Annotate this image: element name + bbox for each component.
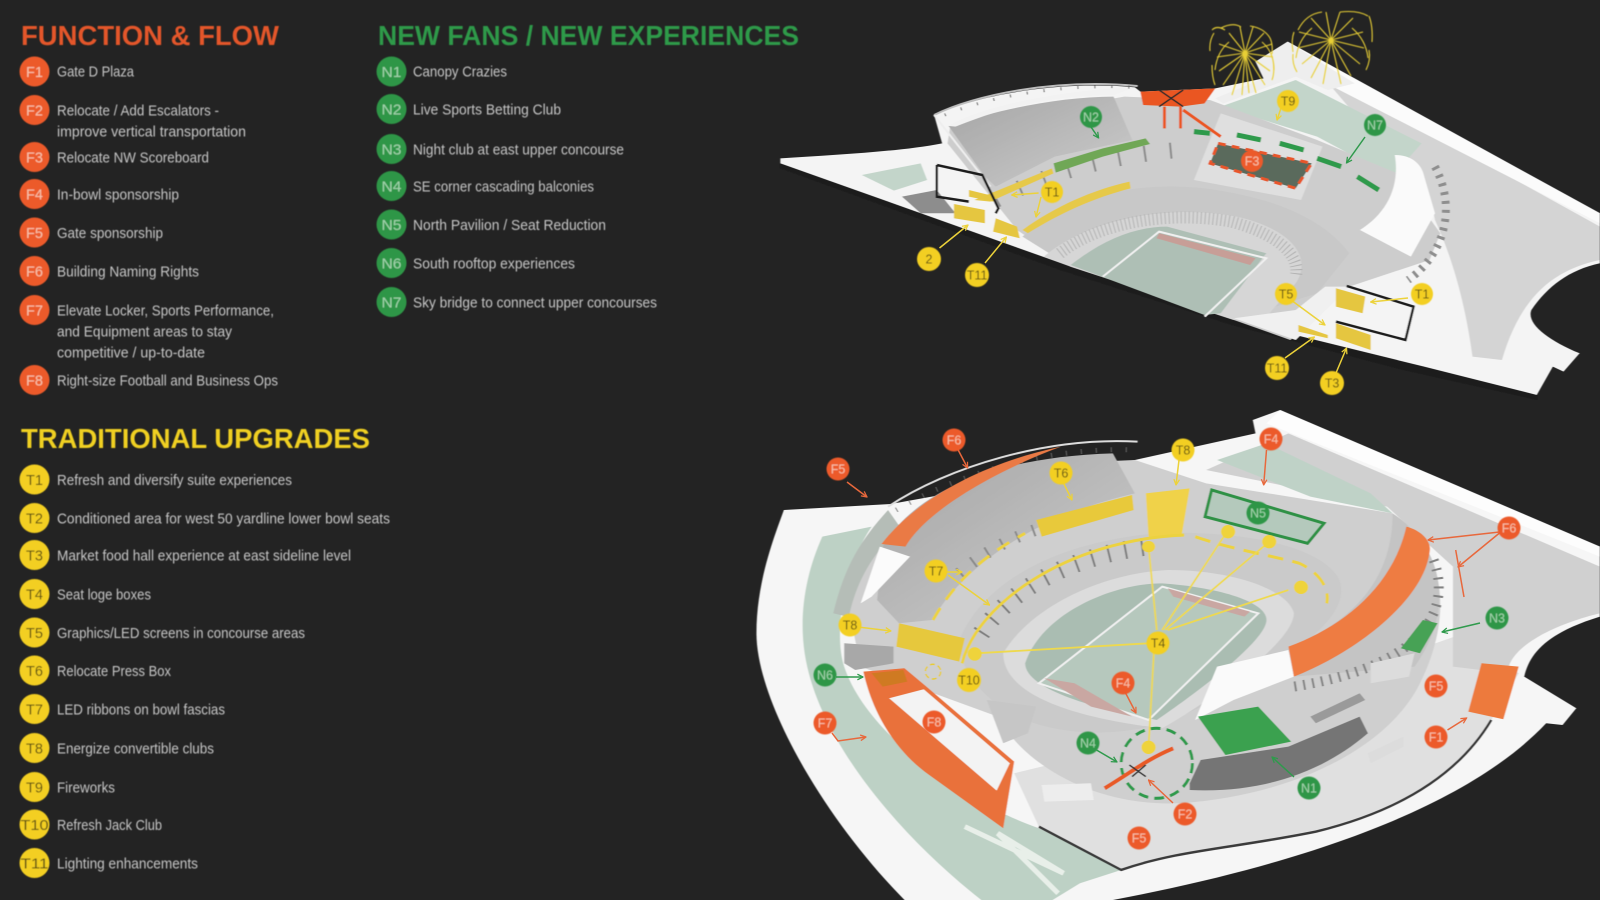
badge N2: N2 (1083, 110, 1099, 124)
field (1071, 227, 1266, 317)
item F3: F3 (26, 150, 43, 166)
item F2 (20, 95, 246, 140)
item F5 (20, 218, 163, 248)
item F8: F8 (26, 372, 43, 390)
item T8: T8 (26, 740, 43, 758)
badge T11 east: T11 (1267, 362, 1287, 376)
badge T6 (1050, 462, 1072, 484)
stadium: lower overall view (756, 410, 1600, 900)
east stand ribs (1408, 167, 1446, 280)
badge N6: N6 (817, 668, 833, 682)
betting club green strip (1054, 138, 1150, 173)
seating bowl rows (1060, 217, 1296, 277)
item N5: North Pavilion / Seat Reduction (413, 218, 606, 234)
item N5 (376, 210, 606, 240)
badge F7: F7 (818, 716, 832, 730)
item T5: Graphics/LED screens in concourse areas (57, 626, 305, 642)
badge T8 north (1172, 438, 1194, 462)
item T5 (20, 618, 305, 648)
badge T4: T4 (1151, 636, 1165, 650)
thin F6 sign line (1456, 550, 1464, 597)
roof band edge (1274, 42, 1600, 223)
arrow T3 (1336, 348, 1346, 373)
item N2 (376, 94, 561, 124)
relocated scoreboard marker (1140, 88, 1221, 137)
T4 loge lines (976, 530, 1288, 747)
arrow T1 east (1371, 298, 1408, 302)
item N4 (376, 171, 594, 201)
item N7 (376, 287, 657, 317)
badge F4 north: F4 (1264, 432, 1278, 446)
item T7: LED ribbons on bowl fascias (57, 702, 225, 718)
item F1: Gate D Plaza (57, 64, 135, 80)
item F1: F1 (26, 64, 43, 81)
item F7: competitive / up-to-date (57, 346, 205, 362)
item N7: Sky bridge to connect upper concourses (413, 296, 657, 312)
arrow T7 b (946, 571, 962, 573)
item T4: T4 (26, 586, 43, 604)
item N7: N7 (382, 294, 402, 312)
item F4 (20, 179, 179, 209)
east scoreboard pavilion (1194, 113, 1322, 200)
badge F6 west (942, 428, 966, 452)
fireworks (1210, 12, 1372, 95)
item T4: Seat loge boxes (57, 588, 151, 604)
badge F3 (1241, 150, 1263, 172)
orange F8 building (863, 668, 1014, 828)
badge F4 north (1260, 428, 1282, 450)
west outline box (937, 165, 998, 213)
item T9: Fireworks (57, 780, 115, 796)
badge T1 east (1411, 283, 1433, 305)
white east wedge (1195, 650, 1294, 720)
item T10: T10 (20, 817, 48, 834)
item T1 (20, 464, 292, 494)
badge T3: T3 (1325, 376, 1339, 390)
item F7 (20, 295, 274, 362)
pale green lawn (1221, 80, 1422, 177)
badge F5 east (1424, 674, 1448, 698)
item N2: N2 (382, 102, 402, 118)
arrow 2 (940, 225, 968, 248)
badge T10: T10 (958, 674, 980, 688)
item N4: N4 (382, 178, 402, 196)
north lawn (1217, 443, 1393, 513)
scoreboard screen (1210, 143, 1312, 188)
badge T3 (1320, 371, 1344, 395)
plaza dark edge (1039, 720, 1491, 870)
badge T5: T5 (1279, 288, 1293, 302)
item F2: improve vertical transportation (57, 124, 246, 140)
ring path white markings (965, 827, 1064, 893)
T10 dashed circle (925, 664, 941, 679)
item N6 (376, 248, 575, 278)
badge T11 east (1265, 356, 1289, 380)
east ribs (1294, 560, 1439, 687)
badge F5 east: F5 (1429, 680, 1443, 694)
badge T8 west: T8 (843, 618, 857, 632)
legend: traditional upgrades (20, 423, 390, 878)
badge F8: F8 (927, 716, 941, 730)
badge T1 west: T1 (1045, 186, 1059, 200)
white roof east (1360, 155, 1435, 257)
yellow west club (896, 623, 965, 662)
orange west crescent (881, 447, 1061, 547)
gate building (1042, 783, 1094, 802)
green N3 panel (1401, 620, 1438, 653)
badge T10 (957, 668, 981, 692)
west wing grey (902, 190, 956, 213)
green N5 pavilion (1205, 490, 1324, 543)
item T10 (20, 810, 162, 840)
southeast seating (1190, 717, 1368, 790)
badge T11 west (965, 263, 989, 287)
plaza ground (1317, 70, 1600, 360)
badge N3 (1486, 606, 1508, 630)
arrow N4 (1096, 750, 1117, 762)
arrow F4 north (1264, 450, 1266, 485)
site base (756, 410, 1600, 900)
yellow suite strips (974, 168, 1131, 233)
yellow north club (1146, 488, 1190, 537)
LED ribbons (933, 533, 1327, 663)
stadium: upper sectional view (780, 42, 1600, 400)
item F7: F7 (26, 302, 43, 320)
item T2: T2 (26, 510, 43, 528)
south white wedge (1234, 287, 1349, 340)
bowl exterior (947, 97, 1440, 340)
arrow F5 north (847, 482, 867, 497)
badge F5 south (1128, 826, 1150, 850)
badge F6 east (1498, 516, 1520, 540)
loge dots (968, 525, 1308, 754)
arrow T11 east (1285, 337, 1314, 358)
stadium exterior (850, 460, 1440, 803)
west pavilion steps (844, 643, 894, 670)
item F8: Right-size Football and Business Ops (57, 374, 278, 390)
item F6: F6 (26, 264, 43, 280)
item T3 (20, 540, 351, 570)
item T8 (20, 733, 214, 763)
badge F2: F2 (1178, 808, 1192, 822)
badge T11 west: T11 (967, 268, 987, 282)
item N5: N5 (382, 217, 402, 234)
item T7: T7 (26, 702, 43, 718)
lower bowl (1003, 570, 1294, 728)
pale green ring path (803, 527, 1121, 900)
badge N2 (1080, 106, 1102, 128)
badge N5 (1246, 502, 1270, 524)
badge F4 field: F4 (1116, 676, 1130, 690)
arrows: lower view (832, 447, 1500, 803)
exterior slot (1310, 693, 1365, 723)
item F3: Relocate NW Scoreboard (57, 150, 209, 166)
badge T8 north: T8 (1176, 444, 1190, 458)
badge N7: N7 (1367, 118, 1383, 132)
orange east crescent (1288, 527, 1430, 677)
badge F5 south: F5 (1132, 832, 1146, 846)
badge F1 (1424, 726, 1448, 748)
arrow N6 (836, 676, 863, 678)
badge N4: N4 (1080, 736, 1096, 750)
badge 2: 2 (926, 252, 933, 266)
arrow T9 (1277, 105, 1282, 120)
item T11: Lighting enhancements (57, 856, 198, 872)
arrow T8 west (858, 627, 891, 631)
canopy roof (934, 84, 1138, 187)
badge F6 east: F6 (1502, 522, 1516, 536)
canopy roof (888, 441, 1138, 510)
east upper deck (1288, 513, 1439, 677)
item T6: Relocate Press Box (57, 664, 172, 680)
west stand shoulder (833, 510, 905, 620)
item T11 (20, 848, 198, 878)
badge T4 (1146, 632, 1170, 654)
badge N5: N5 (1250, 506, 1266, 520)
item T8: Energize convertible clubs (57, 742, 214, 758)
upper aisle ribs (959, 507, 1124, 573)
item F7: and Equipment areas to stay (57, 324, 233, 340)
badge T9: T9 (1281, 94, 1295, 108)
site base (780, 42, 1600, 395)
item F5: F5 (26, 225, 43, 242)
item T2: Conditioned area for west 50 yardline lower bowl seats (57, 512, 390, 528)
item F4: F4 (26, 186, 43, 204)
item T6: T6 (26, 663, 43, 680)
mid bowl (959, 533, 1341, 732)
item N1: Canopy Crazies (413, 64, 507, 80)
item F2: F2 (26, 102, 43, 120)
item T2 (20, 503, 390, 533)
arrow T6 (1064, 483, 1072, 500)
upper ribs (996, 150, 1178, 200)
green N1 roof (1198, 707, 1291, 755)
fireworks launch wedge (1215, 42, 1355, 103)
item T9 (20, 772, 115, 802)
north roof edge (1266, 410, 1600, 557)
white west roof (861, 547, 910, 603)
item T4 (20, 579, 151, 609)
item N6: South rooftop experiences (413, 256, 575, 272)
map badges: lower view (814, 428, 1520, 850)
item N3: N3 (382, 142, 402, 158)
badge F1: F1 (1429, 730, 1443, 744)
item F6: Building Naming Rights (57, 264, 199, 280)
badge 2 (917, 247, 941, 271)
item T11: T11 (20, 856, 48, 872)
badge N3: N3 (1489, 612, 1505, 626)
badge T1 west (1041, 181, 1063, 203)
badge T1 east: T1 (1415, 288, 1429, 302)
item T9: T9 (26, 780, 43, 796)
sky bridge green pieces (1194, 132, 1379, 190)
arrow F6 west (957, 447, 968, 468)
item F4: In-bowl sponsorship (57, 188, 179, 204)
upper bowl (877, 453, 1135, 623)
item F7: Elevate Locker, Sports Performance, (57, 304, 274, 320)
item N3 (376, 134, 624, 164)
badge F8 (922, 710, 946, 734)
badge F4 field (1112, 672, 1134, 694)
arrow F6 east a (1428, 532, 1500, 540)
arrow F1 (1448, 718, 1467, 730)
item N6: N6 (382, 256, 402, 272)
map badges: upper view (917, 90, 1433, 395)
item T3: Market food hall experience at east sideline level (57, 548, 351, 564)
badge F5 north: F5 (831, 462, 845, 476)
exterior blocks (1368, 653, 1415, 763)
badge F7 (814, 712, 836, 734)
badge N6 (814, 664, 836, 686)
shadow edge (780, 163, 1537, 400)
item T7 (20, 694, 225, 724)
east outline box (1336, 286, 1414, 340)
arrow T7 a (948, 575, 990, 605)
arrow N1 (1272, 757, 1294, 777)
arrow F4 field (1124, 690, 1136, 713)
badge N1: N1 (1301, 782, 1317, 796)
yellow east blocks (1298, 288, 1371, 350)
item N1: N1 (382, 64, 402, 81)
item N2: Live Sports Betting Club (413, 102, 561, 118)
item N4: SE corner cascading balconies (413, 180, 594, 196)
lower bowl (1044, 212, 1302, 320)
arrow T8 north (1176, 460, 1179, 485)
arrow N7 (1346, 137, 1365, 163)
upper stand (949, 97, 1132, 187)
east concourse mid bowl (1022, 186, 1349, 320)
item F8 (20, 365, 278, 395)
item F6 (20, 256, 199, 286)
item N3: Night club at east upper concourse (413, 142, 624, 158)
heading: new fans: NEW FANS / NEW EXPERIENCES (378, 20, 799, 51)
yellow press box (1036, 495, 1134, 537)
badge T8 west (838, 614, 862, 636)
badge F6 west: F6 (947, 434, 961, 448)
badge N1 (1298, 776, 1320, 800)
item T6 (20, 656, 172, 686)
item T10: Refresh Jack Club (57, 818, 162, 834)
badge N4 (1076, 732, 1100, 754)
item F3 (20, 142, 209, 172)
escalator (1105, 748, 1173, 788)
field (1025, 583, 1266, 720)
west wing lawn (862, 163, 927, 191)
item T1: T1 (26, 472, 43, 489)
arrow F6 east b (1458, 533, 1500, 567)
legend: new fans new experiences (376, 20, 799, 317)
item F2: Relocate / Add Escalators - (57, 104, 219, 120)
badge T6: T6 (1054, 466, 1068, 480)
arrow N3 (1442, 623, 1480, 632)
badge T9 (1277, 90, 1299, 112)
arrow T1 a (1012, 193, 1039, 195)
arrow F2 (1148, 780, 1173, 803)
arrow T11 west (985, 237, 1006, 263)
N4 dashed circle (1121, 728, 1192, 798)
item N1 (376, 56, 507, 86)
orange gate D block (1468, 663, 1519, 719)
arrows: upper view (940, 105, 1408, 373)
item T5: T5 (26, 625, 43, 642)
item T3: T3 (26, 548, 43, 564)
aisle ribs (981, 547, 1146, 633)
plaza (1014, 633, 1519, 870)
arrow T1 b (1036, 197, 1041, 217)
heading: traditional upgrades: TRADITIONAL UPGRADES (21, 423, 370, 454)
heading: function and flow: FUNCTION & FLOW (21, 20, 280, 51)
badge T7: T7 (929, 564, 943, 578)
south pillars (987, 700, 1036, 743)
badge F2 (1174, 802, 1196, 826)
item F5: Gate sponsorship (57, 226, 163, 242)
badge T7 (924, 560, 948, 582)
badge N7 (1364, 114, 1386, 136)
arrow N2 (1091, 127, 1099, 138)
badge T5 (1275, 283, 1297, 305)
item F1 (20, 56, 135, 86)
legend: function and flow (20, 20, 280, 395)
east ground (1206, 433, 1600, 673)
badge F5 north (826, 458, 850, 480)
arrow F7 (832, 733, 866, 741)
item T1: Refresh and diversify suite experiences (57, 473, 292, 489)
yellow west blocks (954, 190, 1020, 238)
badge F3: F3 (1245, 154, 1259, 168)
arrow T5 (1291, 300, 1325, 325)
